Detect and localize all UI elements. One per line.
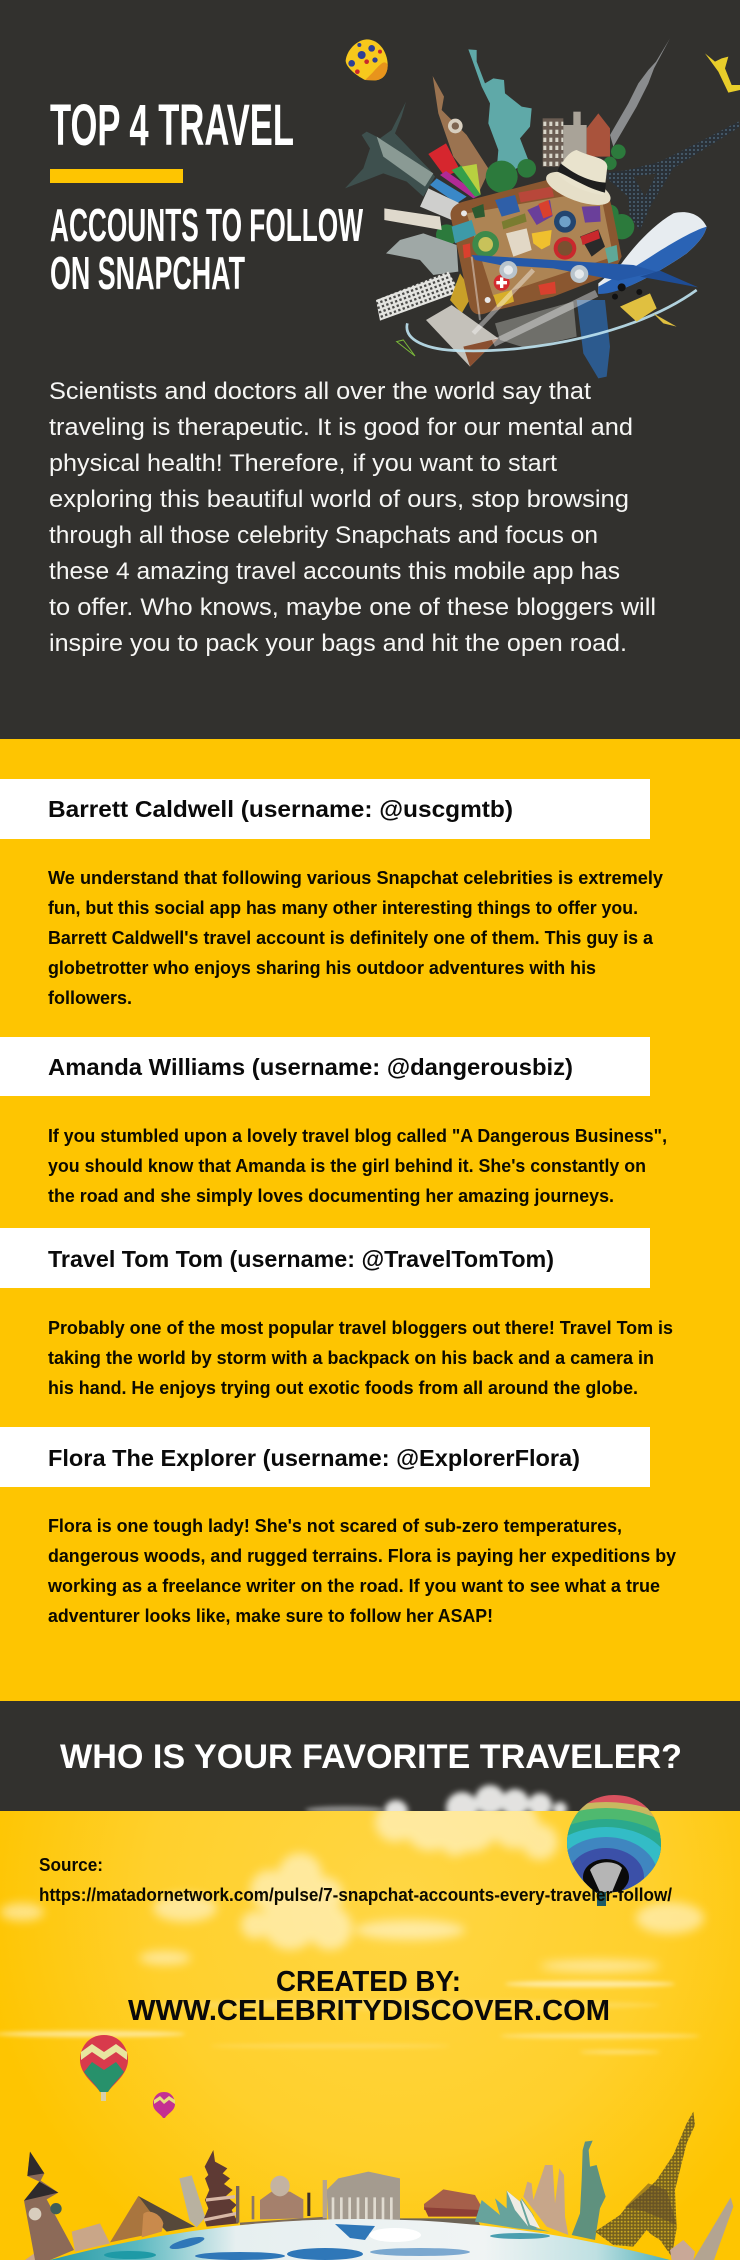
text block: source	[39, 1854, 672, 1905]
text block: Barrett Caldwell description: fun, but this social app has many other interesting things to offer you.	[48, 897, 638, 918]
illustration: Eiffel tower dark	[607, 122, 740, 230]
illustration: pagoda	[204, 2150, 239, 2227]
panel: Amanda Williams	[0, 1037, 667, 1206]
illustration: yellow paper scrap	[620, 293, 677, 327]
text block: Flora The Explorer description: working as a freelance writer on the road. If you want to see what a true	[47, 1575, 660, 1596]
illustration: cloud over the dark band	[304, 1780, 571, 1811]
text block: Barrett Caldwell description	[48, 867, 664, 1008]
text block: Flora The Explorer description: Flora is one tough lady! She's not scared of sub-zero temperatures,	[48, 1515, 622, 1536]
stickers on suitcase	[452, 187, 618, 307]
illustration: memorial with columns	[323, 2172, 400, 2220]
icon: rainbow hot-air balloon	[567, 1795, 661, 1906]
text block: Amanda Williams description: the road and she simply loves documenting her amazing journeys.	[48, 1185, 614, 1206]
illustration: yellow taxi and street	[450, 273, 473, 313]
text block: introduction: physical health! Therefore, if you want to start	[49, 450, 557, 477]
illustration: Statue of Liberty	[468, 49, 532, 177]
illustration: Colosseum	[25, 2223, 110, 2260]
heading: subtitle: ACCOUNTS TO FOLLOW	[50, 199, 363, 251]
illustration: coloured tickets	[420, 164, 481, 220]
illustration: Big Ben	[24, 2152, 74, 2260]
text block: source: https://matadornetwork.com/pulse/7-snapchat-accounts-every-traveler-follow/	[39, 1884, 672, 1905]
illustration: clouds in the footer sky	[0, 1792, 704, 2054]
illustration: small stone building	[670, 2240, 695, 2260]
text block: Amanda Williams description: If you stumbled upon a lovely travel blog called "A Dangerous Business",	[48, 1125, 667, 1146]
illustration: travel collage around a suitcase	[345, 38, 740, 378]
text block: Barrett Caldwell description: Barrett Caldwell's travel account is definitely one of them. This guy is a	[48, 927, 654, 948]
text block: Barrett Caldwell description: followers.	[48, 987, 132, 1008]
icon: yellow hot-air balloon	[346, 39, 388, 80]
text block: Barrett Caldwell description: We understand that following various Snapchat celebrities is extremely	[48, 867, 664, 888]
illustration: straw hat	[542, 150, 615, 212]
heading: subtitle: ON SNAPCHAT	[50, 247, 245, 299]
illustration: Tokyo tower	[610, 38, 670, 147]
illustration: road ribbon	[472, 257, 597, 343]
illustration: palace roof	[400, 2189, 483, 2225]
text block: Flora The Explorer description: dangerous woods, and rugged terrains. Flora is paying her expeditions by	[48, 1545, 677, 1566]
illustration: Sydney Opera House	[475, 2191, 550, 2232]
text block: Flora The Explorer description	[47, 1515, 677, 1626]
heading bar: Barrett Caldwell	[0, 779, 650, 839]
heading bar: Flora The Explorer	[0, 1427, 650, 1487]
panel: dark header background	[0, 0, 740, 739]
illustration: Eiffel Tower	[595, 2112, 695, 2257]
text block: credits: CREATED BY:	[276, 1966, 461, 1998]
text block: Amanda Williams description	[48, 1125, 667, 1206]
illustration: obelisk	[693, 2197, 733, 2260]
text block: introduction: through all those celebrity Snapchats and focus on	[49, 522, 598, 549]
illustration: suitcase	[451, 178, 622, 314]
text block: credits	[128, 1966, 610, 2027]
heading: subtitle	[50, 199, 363, 299]
panel: Flora The Explorer	[0, 1427, 677, 1626]
illustration: landmarks on the right of the globe	[400, 2112, 733, 2260]
illustration: Christ the Redeemer	[345, 102, 435, 197]
panel: Barrett Caldwell	[0, 779, 664, 1008]
text block: introduction: Scientists and doctors all over the world say that	[49, 378, 591, 405]
text block: Travel Tom Tom description: Probably one of the most popular travel bloggers out there! Travel Tom is	[48, 1317, 673, 1338]
panel: sky footer background	[0, 1811, 740, 2260]
illustration: globe	[50, 2219, 670, 2260]
illustration: blue tower	[577, 300, 610, 378]
text block: introduction: these 4 amazing travel accounts this mobile app has	[49, 558, 620, 585]
text block: introduction: traveling is therapeutic. It is good for our mental and	[49, 414, 633, 441]
panel: yellow accounts background	[0, 739, 740, 1701]
panel: Travel Tom Tom	[0, 1228, 673, 1398]
panel: closing question band	[0, 1701, 740, 1811]
icon: yellow paper plane	[705, 53, 740, 93]
text block: source: Source:	[39, 1854, 103, 1875]
text block: credits: WWW.CELEBRITYDISCOVER.COM	[128, 1995, 610, 2027]
text block: introduction: to offer. Who knows, maybe one of these bloggers will	[49, 594, 656, 621]
text block: Travel Tom Tom description: taking the world by storm with a backpack on his back and a camera in	[48, 1347, 654, 1368]
heading bar: Barrett Caldwell: Barrett Caldwell (username: @uscgmtb)	[48, 796, 513, 822]
illustration: foliage around suitcase	[436, 144, 634, 300]
illustration: Sagrada Familia	[523, 2165, 568, 2235]
illustration: red phone booth	[428, 143, 460, 177]
illustration: Statue of Liberty	[572, 2141, 606, 2240]
text block: introduction	[49, 378, 656, 657]
illustration: leaning tower	[179, 2175, 205, 2227]
icon: red and green balloon	[80, 2035, 128, 2101]
illustration: white cathedral	[386, 233, 458, 275]
heading bar: Travel Tom Tom	[0, 1228, 650, 1288]
illustration: swirl	[397, 290, 697, 356]
illustration: skyscraper	[376, 272, 460, 321]
text block: introduction: inspire you to pack your bags and hit the open road.	[49, 630, 627, 657]
illustration: landmarks on the left of the globe	[24, 2150, 400, 2260]
text block: Flora The Explorer description: adventurer looks like, make sure to follow her ASAP!	[48, 1605, 493, 1626]
text block: Barrett Caldwell description: globetrotter who enjoys sharing his outdoor adventures with his	[48, 957, 596, 978]
illustration: leaning tower	[384, 208, 442, 230]
heading bar: Travel Tom Tom: Travel Tom Tom (username: @TravelTomTom)	[48, 1246, 554, 1272]
text block: Travel Tom Tom description: his hand. He enjoys trying out exotic foods from all around the globe.	[48, 1377, 638, 1398]
text block: Travel Tom Tom description	[48, 1317, 673, 1398]
illustration: white colonnade building	[426, 305, 498, 367]
illustration: Big Ben	[433, 76, 489, 190]
accent bar under title	[50, 169, 183, 183]
heading: main title: TOP 4 TRAVEL	[50, 93, 294, 158]
illustration: pyramid and sphinx	[110, 2196, 195, 2242]
heading: closing question: WHO IS YOUR FAVORITE TRAVELER?	[60, 1738, 682, 1776]
heading bar: Flora The Explorer: Flora The Explorer (username: @ExplorerFlora)	[48, 1445, 580, 1471]
heading bar: Amanda Williams	[0, 1037, 650, 1096]
illustration: Taj Mahal	[240, 2176, 327, 2225]
heading bar: Amanda Williams: Amanda Williams (username: @dangerousbiz)	[48, 1054, 573, 1080]
icon: blue and white airplane	[472, 212, 707, 300]
illustration: colosseum	[495, 302, 577, 348]
text block: Amanda Williams description: you should know that Amanda is the girl behind it. She's constantly on	[48, 1155, 646, 1176]
icon: small pink balloon	[153, 2092, 175, 2118]
text block: introduction: exploring this beautiful world of ours, stop browsing	[49, 486, 629, 513]
illustration: Dutch houses	[543, 112, 610, 167]
